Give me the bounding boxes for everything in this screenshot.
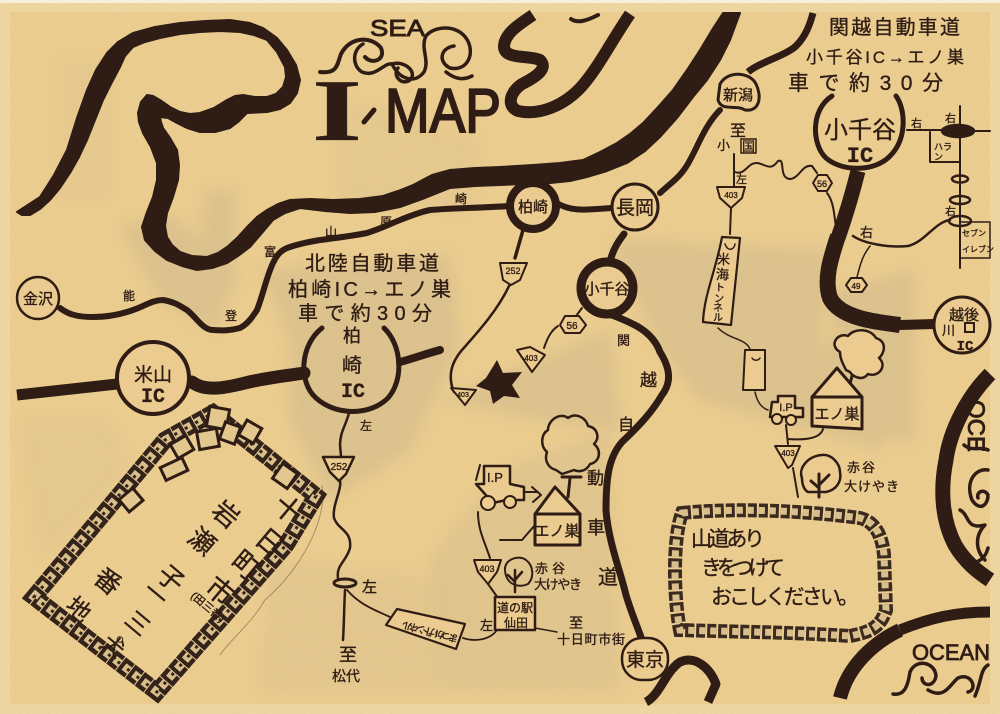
traffic signal group <box>942 125 974 226</box>
Ojiya IC node <box>815 96 903 169</box>
route text: Hokuriku expressway: 北陸自動車道 <box>305 252 439 275</box>
title: I MAP: MAP <box>385 77 501 146</box>
stone frame panel: mountain road notice <box>675 510 886 636</box>
title: sea waves and SEA: SEA <box>370 15 426 41</box>
Echigo-Kawaguchi IC node: IC <box>957 339 974 355</box>
handwritten address: ○ <box>112 630 129 648</box>
tunnel sign and route to Ie-no-su: 海 <box>716 267 729 282</box>
route text: Kan-etsu expressway <box>788 16 964 95</box>
Niigata node: 新潟 <box>723 87 753 104</box>
title: sea waves and SEA <box>320 15 472 82</box>
label: Hokuriku road characters: 山 <box>325 225 337 239</box>
icon: Akaya keyaki tree <box>801 455 840 497</box>
handwritten address: 岩 <box>206 495 245 534</box>
road from Kashiwazaki IC to Matsudai: 左 <box>480 618 493 633</box>
Echigo-Kawaguchi IC node: 越後 <box>949 307 979 324</box>
Nagaoka node: 長岡 <box>616 198 654 219</box>
handwritten address: 三 <box>119 606 155 642</box>
route sign 403 <box>474 560 501 584</box>
route sign 403: 403 <box>524 354 538 363</box>
Ojiya node <box>581 262 633 314</box>
landmark: Seven-Eleven: セブン <box>962 228 986 238</box>
route text: Hokuriku expressway <box>288 252 451 325</box>
route sign 49 <box>846 278 867 292</box>
route sign 403 <box>517 347 545 372</box>
handwritten address: 日 <box>249 522 291 564</box>
road: Yoneyama to Kashiwazaki IC <box>17 350 440 395</box>
icon: tree behind house <box>835 330 884 378</box>
icon: house <box>534 477 581 545</box>
label: road characters: 関 <box>617 333 630 348</box>
road from Kashiwazaki IC to Matsudai <box>323 413 497 684</box>
Niigata node <box>718 74 759 110</box>
Yoneyama IC node: 米山 <box>134 364 172 386</box>
notice text: きをつけて <box>701 557 785 580</box>
stone border <box>34 413 316 692</box>
local roads and landmarks near Ojiya IC: 右 <box>860 225 873 240</box>
route sign 403: 403 <box>781 449 795 458</box>
handwritten address: 犬 <box>97 630 130 663</box>
label: road characters: 自 <box>618 416 634 434</box>
right hand car, house and tree: 大けやき <box>844 479 899 494</box>
Nagaoka node <box>611 184 658 258</box>
stone frame panel: address tag <box>34 406 323 692</box>
label: road characters: 越 <box>640 371 657 390</box>
notice text <box>691 528 859 609</box>
icon: I.P car <box>476 466 524 510</box>
route sign 56: 56 <box>566 321 578 332</box>
Michi-no-eki Senda box <box>495 597 535 630</box>
local roads and landmarks near Ojiya IC: 右 <box>945 111 956 125</box>
road from Kashiwazaki IC to Matsudai: 松代 <box>332 668 360 684</box>
route text: Kan-etsu expressway: 小千谷IC→エノ巣 <box>806 48 964 67</box>
Ojiya IC node: IC <box>847 144 873 169</box>
Yoneyama IC node <box>117 342 189 414</box>
label: Hokuriku road characters <box>123 192 467 323</box>
coastline: bottom hook near Tokyo <box>646 660 716 702</box>
Kashiwazaki IC node: 柏 <box>343 326 361 346</box>
Yoneyama IC node: IC <box>141 386 165 409</box>
tunnel sign and route to Ie-no-su: 米 <box>717 252 730 267</box>
handwritten address: 一 <box>137 577 173 613</box>
local roads and landmarks near Ojiya IC: 右 <box>911 116 922 130</box>
icon: I.P car <box>770 396 803 425</box>
to Oguni and route 403: 左 <box>736 173 747 186</box>
Kashiwazaki city node: 柏崎 <box>518 199 548 216</box>
to Oguni and route 403: 国 <box>742 139 755 154</box>
handwritten address <box>60 489 309 663</box>
Echigo-Kawaguchi IC node: 川 <box>942 323 955 338</box>
label: road characters: 車 <box>587 518 605 538</box>
route sign 49: 49 <box>852 282 861 291</box>
to Oguni and route 403: 小 <box>717 138 730 153</box>
handwritten address: 子 <box>151 559 190 598</box>
route sign 403 small: 403 <box>457 392 469 399</box>
route sign 403: 403 <box>479 564 495 574</box>
ocean arc right <box>943 374 990 580</box>
label: Hokuriku road characters: 原 <box>380 215 392 229</box>
Michi-no-eki Senda box: 仙田 <box>504 616 528 630</box>
route sign 403 small <box>451 388 476 405</box>
Kashiwazaki IC node: IC <box>341 381 365 404</box>
route sign 403: 403 <box>724 191 738 200</box>
ocean arc bottom: OCEAN <box>912 640 990 665</box>
handwritten address: 市 <box>199 571 241 613</box>
road: Kashiwazaki down to star <box>451 230 586 405</box>
tunnel name tag <box>386 609 465 649</box>
tunnel sign and route to Ie-no-su <box>703 237 768 410</box>
icon: house <box>812 368 862 429</box>
label: Hokuriku road characters: 富 <box>264 245 276 259</box>
route sign 252: 252 <box>331 462 348 473</box>
handwritten address: 番 <box>88 562 127 601</box>
route text: Kan-etsu expressway: 車で約30分 <box>788 72 943 95</box>
right hand car, house and tree: 赤谷 <box>847 460 875 475</box>
Kashiwazaki IC node <box>304 326 399 412</box>
right hand car, house and tree <box>770 330 899 497</box>
icon: I.P car: I.P <box>779 402 793 414</box>
Kan-etsu expressway thick road <box>828 171 934 325</box>
local roads and landmarks near Ojiya IC: 右 <box>945 204 956 218</box>
icon: house: エノ巣 <box>534 523 580 540</box>
Ojiya IC node: 小千谷 <box>824 117 896 144</box>
Echigo-Kawaguchi IC node <box>934 297 990 355</box>
label: Hokuriku road characters: 登 <box>225 308 237 323</box>
handwritten address: 十 <box>267 489 309 531</box>
handwritten address: 町 <box>225 545 267 587</box>
Kanazawa node: 金沢 <box>23 291 53 308</box>
route sign 252 <box>500 263 527 285</box>
road: Ojiya to Tokyo <box>587 315 669 640</box>
tunnel sign and route to Ie-no-su: ト <box>715 283 725 294</box>
icon: Akaya keyaki tree <box>505 558 532 592</box>
Kashiwazaki IC node: 崎 <box>342 354 362 377</box>
tunnel name tag: まつかげトンネル <box>401 618 460 645</box>
route sign 252 <box>323 457 354 481</box>
label: road characters <box>587 333 657 589</box>
label: Hokuriku road characters: 崎 <box>455 192 467 206</box>
landmark: Seven-Eleven: イレブン <box>962 244 994 254</box>
stone border <box>675 510 886 636</box>
Kashiwazaki city node <box>510 183 612 229</box>
label: road characters: 動 <box>587 469 604 488</box>
coastline: upper wave beside title <box>504 14 630 112</box>
route text: Kan-etsu expressway: 関越自動車道 <box>829 16 960 39</box>
route sign 403 <box>775 446 800 468</box>
center car, house, tree and station <box>474 416 625 647</box>
Michi-no-eki Senda box: 道の駅 <box>497 601 533 615</box>
road from Kashiwazaki IC to Matsudai: 左 <box>360 418 372 433</box>
road: Nagaoka to Niigata <box>660 13 813 193</box>
route text: Hokuriku expressway: 柏崎IC→エノ巣 <box>288 278 451 301</box>
icon: house: エノ巣 <box>814 406 860 423</box>
ocean lettering <box>960 400 989 562</box>
road from Kashiwazaki IC to Matsudai: 左 <box>362 579 377 596</box>
landmark: Halan: ン <box>934 152 943 162</box>
large stones at top of frame <box>119 406 298 512</box>
notice text: おこしください。 <box>711 586 859 609</box>
route sign 252: 252 <box>505 266 521 276</box>
to Oguni and route 403: 至 <box>730 123 746 140</box>
title: I MAP: I <box>312 63 362 160</box>
ocean arc bottom <box>840 612 990 698</box>
coastline: sea of Japan main brush stroke <box>17 13 740 270</box>
local roads and landmarks near Ojiya IC <box>846 106 994 292</box>
tunnel sign and route to Ie-no-su: ネ <box>713 302 723 314</box>
Ojiya node: 小千谷 <box>584 281 630 298</box>
center car, house, tree and station: 十日町市街 <box>557 632 625 647</box>
road: Hokuriku expressway <box>60 192 510 330</box>
route text: Hokuriku expressway: 車で約30分 <box>298 302 432 325</box>
notice text: 山道あり <box>691 528 765 551</box>
landmark: Halan: ハラ <box>934 142 952 152</box>
tunnel sign and route to Ie-no-su: ン <box>714 294 724 305</box>
icon: destination star <box>476 360 522 404</box>
handwritten address: (田三番) <box>188 589 227 625</box>
route sign 56: 56 <box>817 179 827 189</box>
icon: large tree <box>542 416 599 474</box>
Kanazawa node <box>17 277 59 319</box>
title: I MAP <box>312 63 501 160</box>
icon: I.P car: I.P <box>487 470 503 485</box>
handwritten address: 地 <box>60 592 96 628</box>
center car, house, tree and station: 赤谷 <box>535 561 565 576</box>
center car, house, tree and station: 至 <box>569 615 583 631</box>
route sign 56 <box>560 316 586 333</box>
label: Hokuriku road characters: 能 <box>123 289 135 303</box>
label: road characters: 道 <box>598 566 618 589</box>
ocean lettering: OCE <box>962 400 989 452</box>
tunnel sign and route to Ie-no-su: ル <box>713 313 723 324</box>
center car, house, tree and station: 大けやき <box>534 577 582 592</box>
Tokyo node: 東京 <box>626 649 664 671</box>
landmark: Halan <box>930 132 960 162</box>
to Oguni and route 403 <box>717 123 836 234</box>
handwritten address: 瀬 <box>182 522 221 561</box>
landmark: Seven-Eleven <box>960 222 994 258</box>
road from Kashiwazaki IC to Matsudai: 至 <box>339 645 357 665</box>
Tokyo node <box>622 638 668 680</box>
